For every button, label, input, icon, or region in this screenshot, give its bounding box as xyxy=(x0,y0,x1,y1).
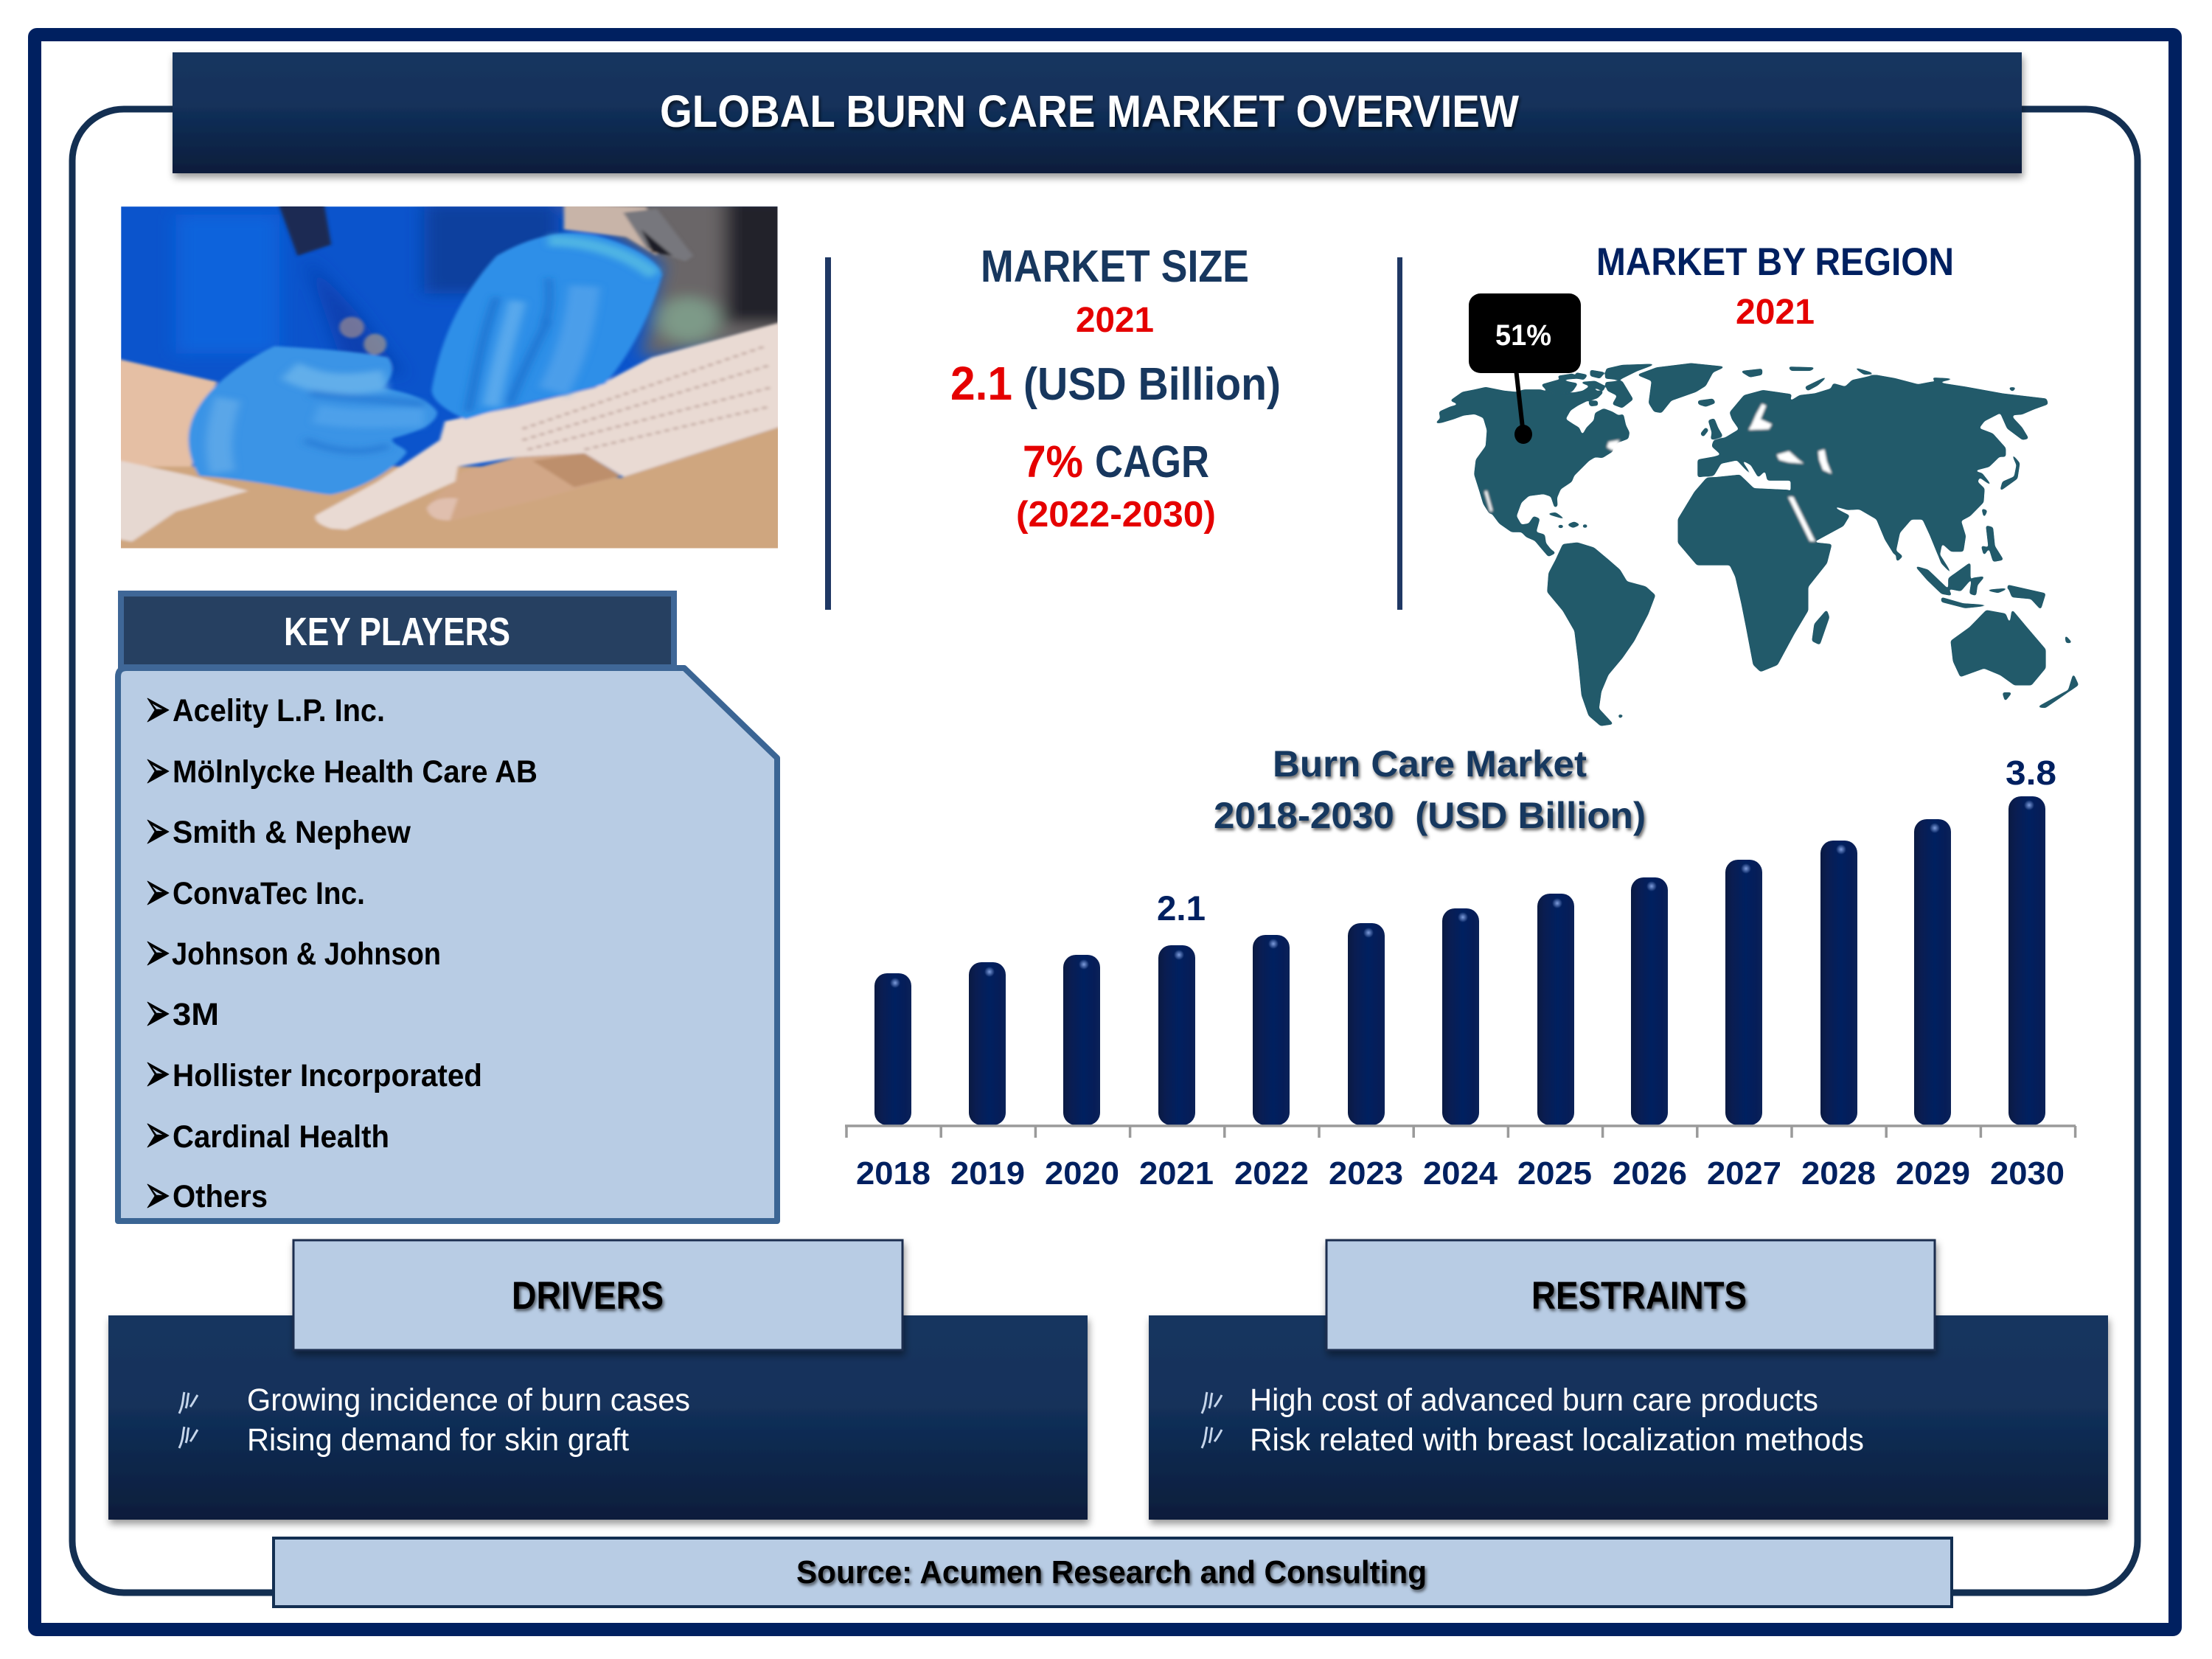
panel: restraints xyxy=(1149,1240,2108,1520)
source bar xyxy=(274,1538,1952,1607)
chart title: 2018-2030 (USD Billion) xyxy=(1214,795,1646,836)
cagr period: (2022-2030) xyxy=(1016,495,1216,535)
restraint item: Risk related with breast localization methods xyxy=(1250,1422,1864,1458)
bars xyxy=(874,796,2045,1125)
year labels: 2026 xyxy=(1613,1155,1687,1192)
key players list: Others xyxy=(173,1179,268,1214)
chart title: Burn Care Market xyxy=(1273,743,1587,785)
panel: key players xyxy=(118,594,777,1221)
key players list: Hollister Incorporated xyxy=(173,1058,482,1093)
year labels: 2024 xyxy=(1423,1155,1498,1192)
driver item: Rising demand for skin graft xyxy=(247,1422,629,1458)
market size heading: MARKET SIZE xyxy=(981,241,1249,291)
driver item: Growing incidence of burn cases xyxy=(247,1382,690,1418)
region heading: MARKET BY REGION xyxy=(1596,240,1954,284)
year labels: 2020 xyxy=(1045,1155,1119,1192)
source bar: Source: Acumen Research and Consulting xyxy=(796,1554,1427,1590)
drivers body xyxy=(108,1315,1088,1520)
drivers tab: DRIVERS xyxy=(512,1274,664,1318)
title banner xyxy=(173,52,2022,173)
chart: burn care market bars xyxy=(845,743,2076,1192)
restraints tab: RESTRAINTS xyxy=(1531,1274,1747,1318)
year labels: 2019 xyxy=(950,1155,1025,1192)
restraints body xyxy=(1149,1315,2108,1520)
key players list: 3M xyxy=(173,997,219,1032)
year labels xyxy=(856,1155,2065,1192)
restraint item: High cost of advanced burn care products xyxy=(1250,1382,1818,1418)
icon: bullet xyxy=(179,1427,198,1448)
year labels: 2025 xyxy=(1517,1155,1592,1192)
key players list: Cardinal Health xyxy=(173,1119,389,1155)
value label 2030: 3.8 xyxy=(2006,754,2056,792)
icon: bullet xyxy=(1202,1392,1222,1413)
icon: bullet xyxy=(179,1392,198,1413)
year labels: 2029 xyxy=(1896,1155,1970,1192)
icon: bullet xyxy=(1202,1427,1222,1448)
glove shading xyxy=(219,241,655,472)
year labels: 2027 xyxy=(1707,1155,1781,1192)
market by region block xyxy=(1435,240,2078,726)
key players list xyxy=(147,693,538,1214)
key players list: Mölnlycke Health Care AB xyxy=(173,754,538,790)
callout: 51% share xyxy=(1469,293,1581,444)
world map xyxy=(1435,364,2078,726)
key players list panel xyxy=(118,668,777,1221)
key players header: KEY PLAYERS xyxy=(284,610,510,654)
title: GLOBAL BURN CARE MARKET OVERVIEW xyxy=(660,86,1519,136)
drivers tab xyxy=(293,1240,902,1350)
market region divider xyxy=(1397,257,1402,610)
market size value: 2.1 xyxy=(950,357,1012,410)
key players list: Johnson & Johnson xyxy=(172,936,441,972)
year labels: 2023 xyxy=(1329,1155,1403,1192)
cagr label: CAGR xyxy=(1095,437,1209,487)
key players list: ConvaTec Inc. xyxy=(173,876,365,911)
value label 2021: 2.1 xyxy=(1157,888,1206,928)
market size unit: (USD Billion) xyxy=(1023,359,1281,410)
year labels: 2022 xyxy=(1234,1155,1309,1192)
market size divider xyxy=(825,257,831,610)
year labels: 2018 xyxy=(856,1155,931,1192)
market size block xyxy=(950,241,1281,535)
market size year: 2021 xyxy=(1076,301,1154,340)
panel: drivers xyxy=(108,1240,1088,1520)
axis xyxy=(845,1126,2076,1138)
year labels: 2028 xyxy=(1801,1155,1876,1192)
key players list: Smith & Nephew xyxy=(173,815,411,850)
key players header xyxy=(121,594,674,667)
cagr value: 7% xyxy=(1023,437,1083,487)
key players list: Acelity L.P. Inc. xyxy=(173,693,385,728)
year labels: 2021 xyxy=(1139,1155,1214,1192)
callout: 51% share: 51% xyxy=(1495,319,1551,352)
year labels: 2030 xyxy=(1990,1155,2065,1192)
restraints tab xyxy=(1326,1240,1935,1350)
region year: 2021 xyxy=(1736,293,1815,332)
chart title xyxy=(1214,743,1646,836)
photo: gloved hands dressing a burn xyxy=(103,195,796,560)
